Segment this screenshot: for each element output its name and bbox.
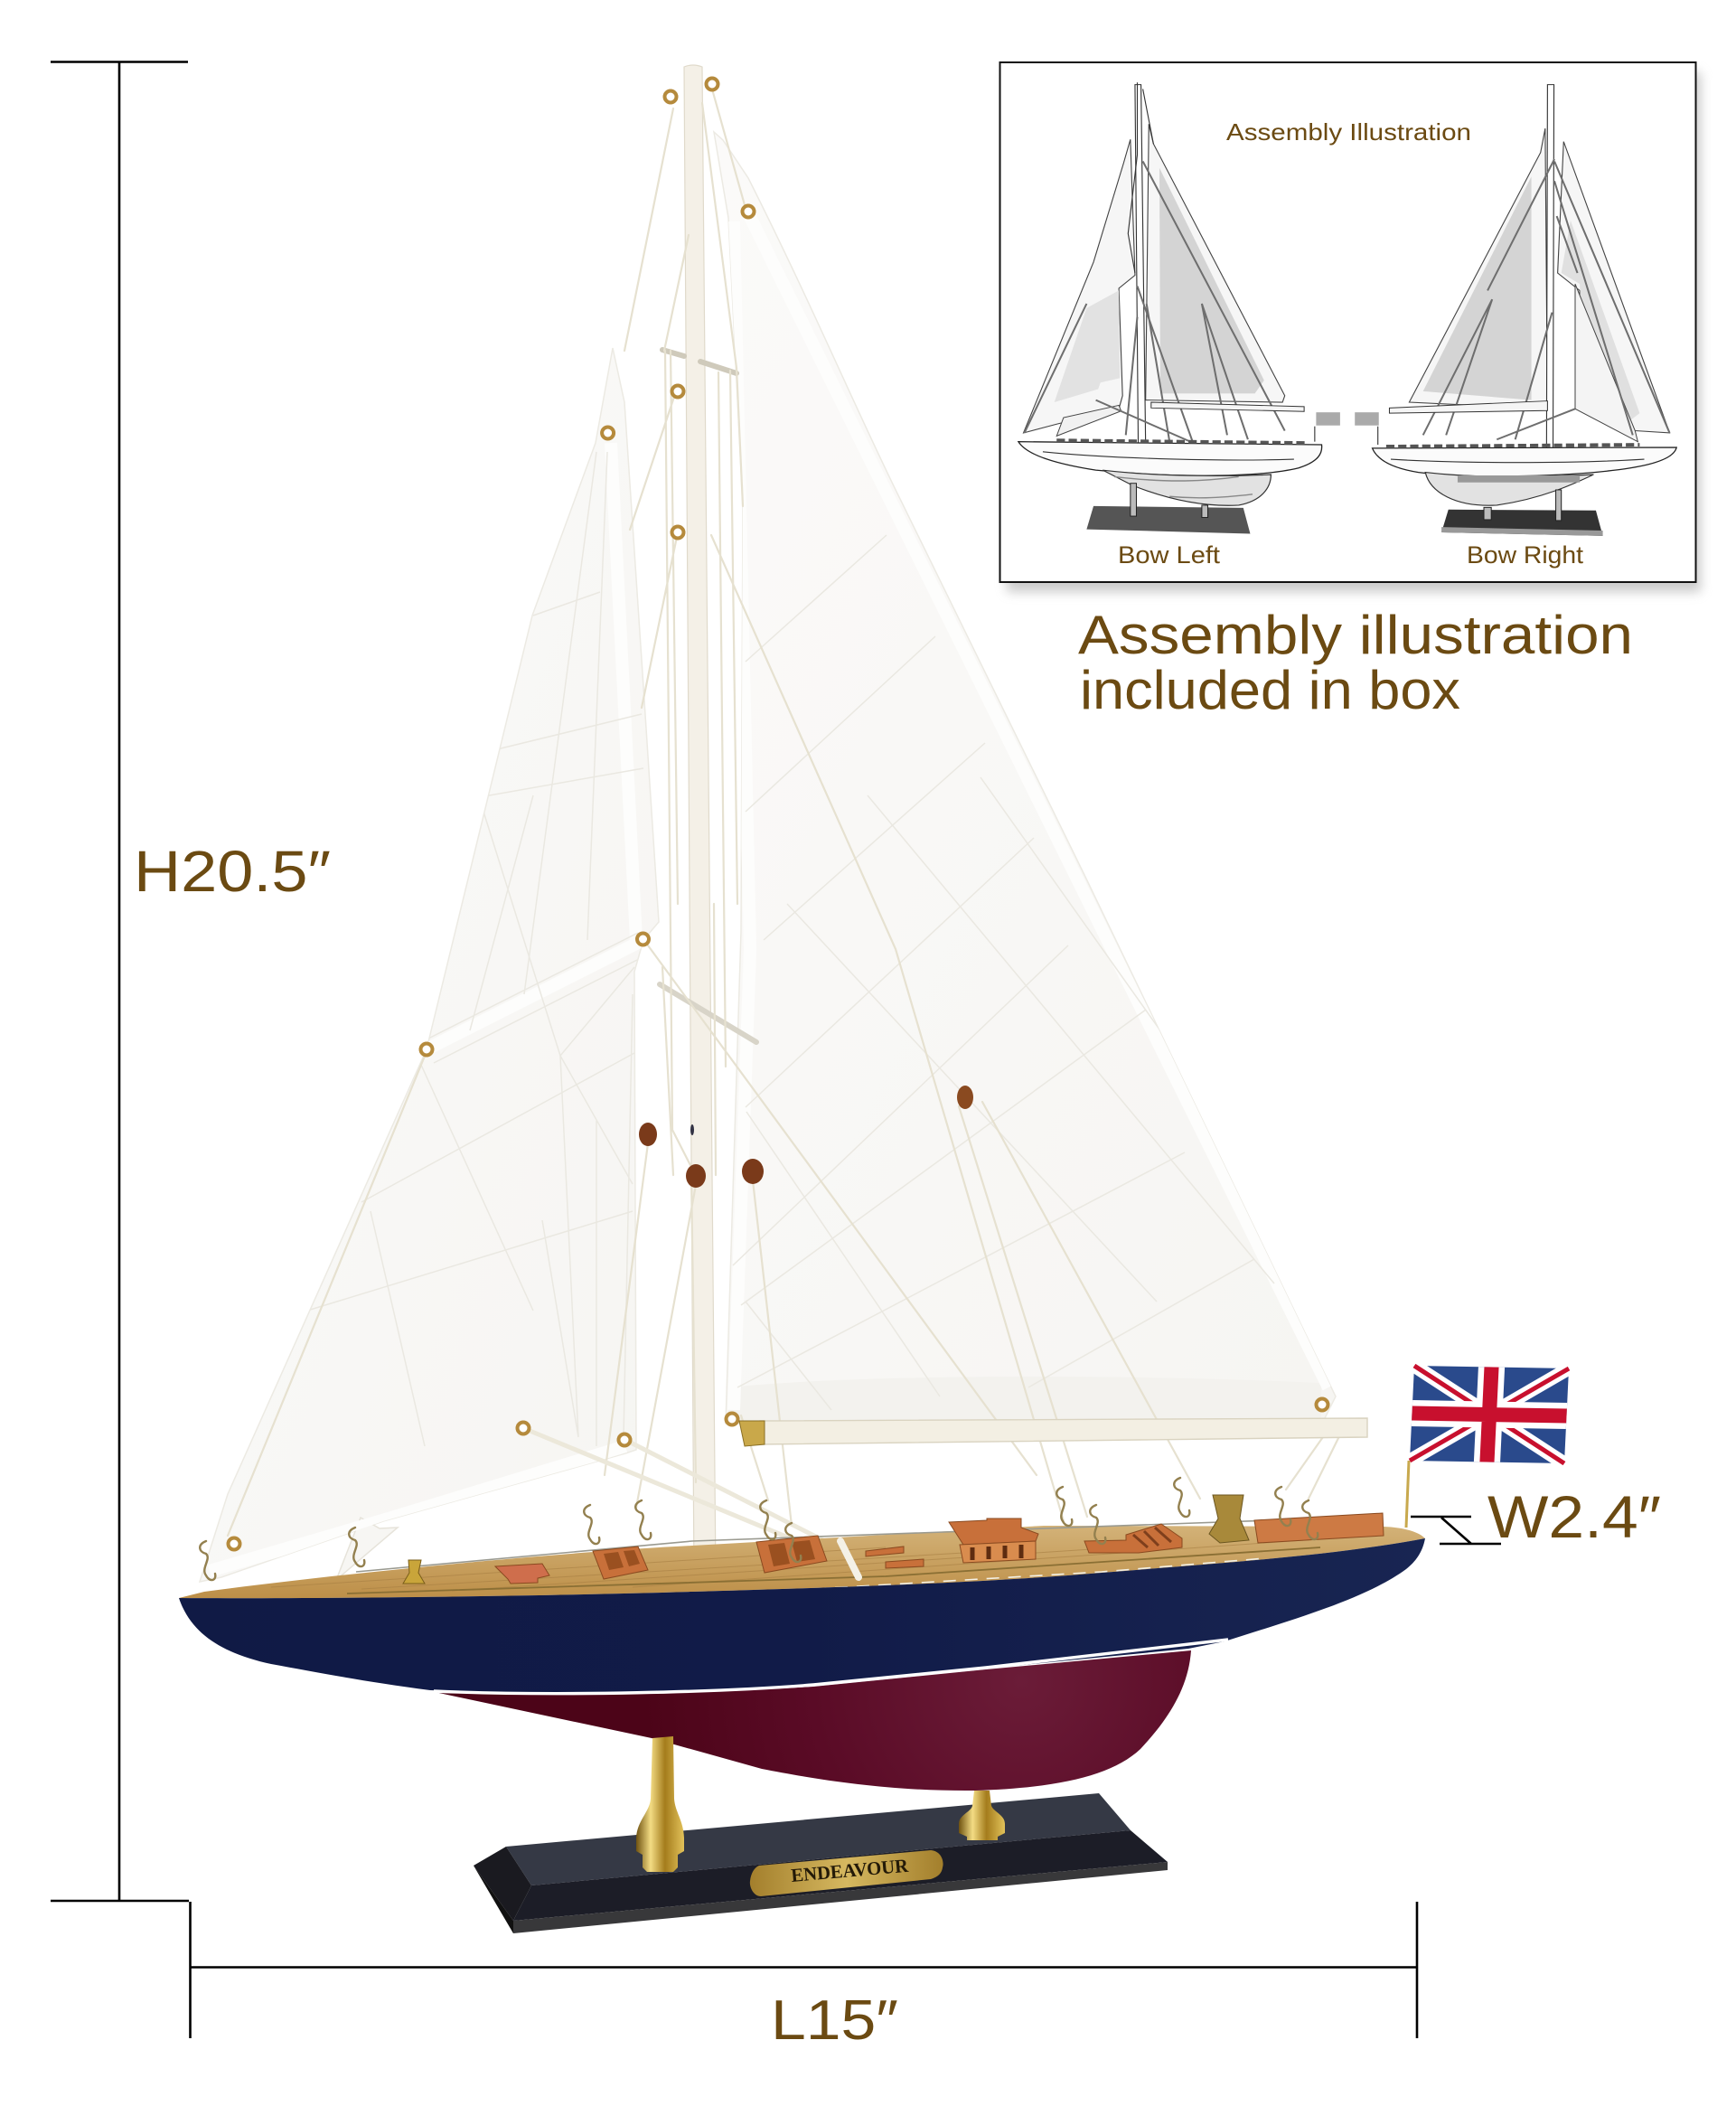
cabin [949,1518,1038,1563]
foresail [200,348,659,1582]
panel title: Assembly Illustration [1226,118,1471,146]
hull: red keel [435,1650,1191,1791]
caption: assembly illustration included [1078,605,1633,720]
boom [739,1418,1367,1446]
mainsail [714,132,1336,1426]
flag: union jack [1410,1366,1569,1463]
line art: bow left ship [1018,82,1340,533]
line art: bow right ship [1355,85,1676,536]
brass post: stern [636,1736,684,1872]
caption: assembly illustration included: Assembly illustration [1078,605,1633,665]
ship model [179,65,1569,1933]
hull: navy topsides [179,1538,1425,1695]
deck fittings [200,1478,1384,1584]
slatted hatch [1084,1524,1182,1553]
nameplate [750,1850,943,1896]
mast [684,65,716,1577]
height label: H20.5″ [134,839,331,904]
grommets [228,78,1328,1549]
dimension: length line [190,1902,1417,2038]
width label: W2.4″ [1487,1483,1661,1550]
hull: waterline stripe [434,1640,1228,1694]
bell [403,1560,425,1584]
dimension: width line [1411,1517,1501,1544]
winch [1209,1495,1249,1543]
flag pole [1406,1461,1409,1528]
hatch box one [593,1547,648,1579]
deck [179,1518,1425,1598]
long box [1254,1513,1384,1543]
rope knot [840,1541,859,1577]
dimension: height line [51,61,189,1901]
panel: assembly illustration [999,62,1701,592]
spreaders [660,350,756,1042]
hatch box two [756,1536,827,1573]
nameplate: ENDEAVOUR [790,1855,910,1886]
blocks [639,1086,973,1188]
caption: bow left: Bow Left [1118,541,1221,569]
caption: bow right: Bow Right [1467,541,1584,569]
rigging [228,86,1340,1563]
brass post: bow [959,1791,1005,1840]
caption: assembly illustration included: included in box [1080,660,1460,720]
plank hatch [495,1564,549,1584]
hooks [200,1478,1318,1580]
display stand [474,1736,1168,1933]
length label: L15″ [771,1989,898,2052]
winch slats [866,1547,924,1568]
